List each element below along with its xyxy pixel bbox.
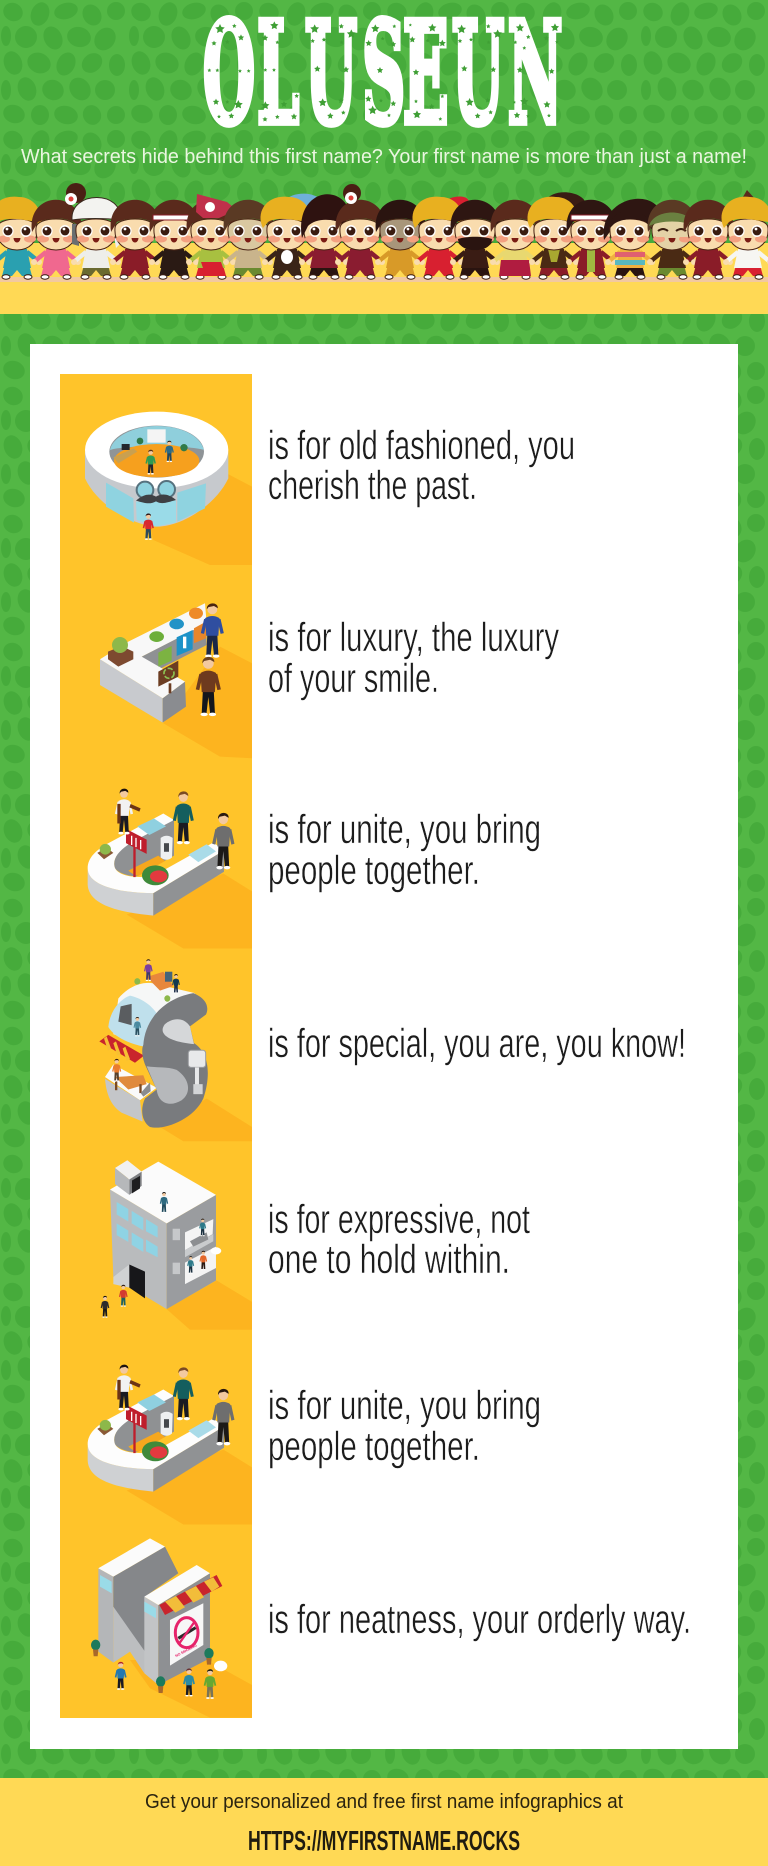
- icon: letter U food counter: [88, 789, 252, 948]
- text: E line: is for expressive, not: [268, 1196, 530, 1242]
- orange illustration column: [60, 374, 252, 1718]
- character 15: blond with dark vest: [528, 192, 586, 279]
- banner: yellow band with parade of characters: [0, 183, 768, 314]
- row: L is for luxury: [100, 603, 559, 758]
- character 10: maroon with flower: [335, 184, 386, 279]
- text: U line repeat: people together.: [268, 1423, 480, 1469]
- text: U line: [268, 806, 541, 893]
- character 19: maroon robe: [683, 200, 734, 279]
- icon: letter E building: [101, 1160, 252, 1330]
- footer: [0, 1778, 768, 1866]
- character 5: black outfit with headband: [149, 200, 200, 279]
- character 4: maroon and lime: [110, 200, 161, 279]
- icon: letter N shop with no smoking sign: NO SMOKING: [175, 1643, 198, 1658]
- icon: letter U food counter repeat: [88, 1365, 252, 1524]
- subtitle: What secrets hide behind this first name? Your first name is more than just a name!: [21, 146, 747, 168]
- character 16: maroon with green stripe and headband: [566, 200, 617, 279]
- character 20: blond in white and red: [722, 190, 768, 279]
- icon: letter L recycling counter: [100, 603, 252, 758]
- text: L line: of your smile.: [268, 655, 439, 701]
- character 3: white headdress: [71, 198, 122, 279]
- text: O line: is for old fashioned, you: [268, 422, 575, 468]
- row: S is for special: [99, 959, 686, 1141]
- text: L line: is for luxury, the luxury: [268, 614, 559, 660]
- character 12: red dress: [413, 196, 469, 279]
- white content panel: [30, 344, 738, 1749]
- row: U is for unite: [88, 789, 541, 948]
- text: E line: [268, 1196, 530, 1282]
- character 18: green headband, closed eyes: [647, 200, 698, 279]
- text: O line: cherish the past.: [268, 462, 477, 508]
- character 11: ochre robe: [375, 200, 426, 279]
- footer url: HTTPS://MYFIRSTNAME.ROCKS: [248, 1825, 520, 1856]
- character 1: blond in blue overalls: [0, 197, 43, 279]
- text: E line: one to hold within.: [268, 1236, 510, 1282]
- character 17: rainbow striped top: [604, 199, 662, 279]
- icon: letter N shop with no smoking sign: [91, 1538, 252, 1718]
- character 9: tall black hat: [299, 194, 350, 279]
- text: L line: [268, 614, 559, 701]
- row: E is for expressive: [101, 1160, 530, 1330]
- character 14: polka dot robe: [490, 200, 541, 279]
- text: O line: [268, 422, 575, 508]
- text: U line repeat: [268, 1382, 541, 1469]
- icon: letter O building with glasses: [85, 412, 252, 565]
- text: U line: is for unite, you bring: [268, 806, 541, 852]
- row: N is for neatness: [91, 1538, 691, 1718]
- icon: letter S office: [99, 959, 252, 1141]
- text: U line: people together.: [268, 847, 480, 893]
- character 8: blond with blue hat: [261, 194, 321, 279]
- character 13: black beard: [450, 200, 501, 279]
- character 2: pink kimono with flower: [31, 183, 86, 279]
- footer call to action: Get your personalized and free first name infographics at: [145, 1791, 623, 1813]
- row: O is for old fashioned: [85, 412, 575, 565]
- character 6: red hat and skirt: [186, 194, 237, 279]
- character 7: grass skirt: [223, 200, 274, 279]
- row: U is for unite (second): [88, 1365, 541, 1524]
- text: U line repeat: is for unite, you bring: [268, 1382, 541, 1428]
